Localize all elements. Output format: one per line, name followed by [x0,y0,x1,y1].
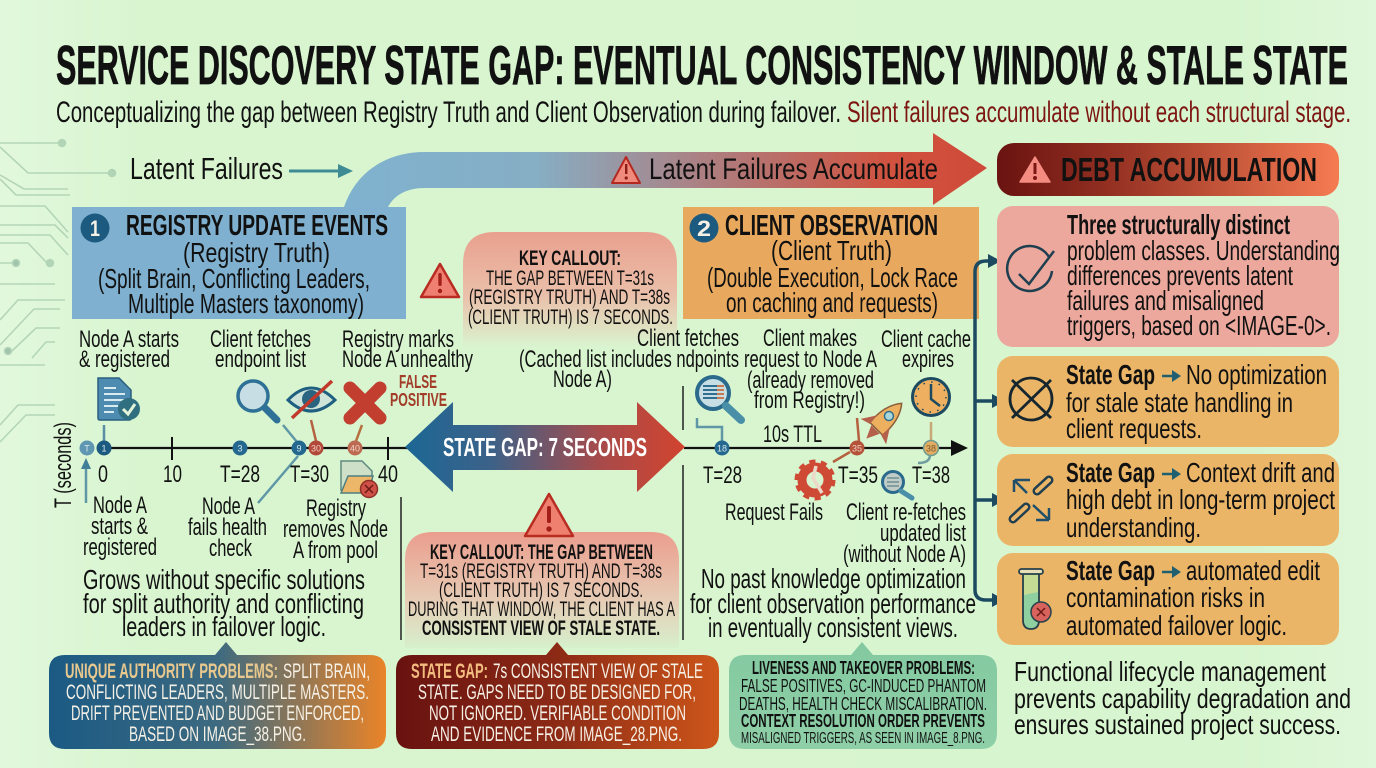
labels below registry timeline: registered [83,534,157,561]
axis markers: 40 [350,444,360,454]
arrow glyph [1162,468,1181,480]
client cache expires label [881,326,971,373]
client makes request label: from Registry!) [754,387,865,414]
card: automated edit contamination: State Gap [1066,555,1155,586]
callout: key callout top: KEY CALLOUT: [519,247,621,270]
panel: unique authority problems: BASED ON IMAGE_38.PNG. [129,723,306,746]
client timeline tick labels [703,462,950,489]
text: no past knowledge optimization: in eventually consistent views. [708,612,958,643]
number badge 1 [80,214,110,242]
client makes request label [744,325,877,414]
text: grows without specific solutions [83,564,365,642]
registry timeline tick labels [98,461,398,488]
number badge 2 [690,214,718,242]
registry timeline tick labels: T=28 [220,461,260,488]
card: automated edit contamination [997,553,1339,645]
card: context drift: State Gap [1066,457,1155,488]
panel: unique authority problems: SPLIT BRAIN, [283,660,370,683]
card: three structurally distinct [997,206,1340,347]
false positive label: FALSE [399,372,437,392]
axis markers: 30 [311,444,321,454]
icon: failed gear [797,462,833,498]
client makes request label: Client makes [763,325,857,352]
arrow: state gap 7 seconds: STATE GAP: 7 SECONDS [443,432,647,462]
icon: crossed circle [1010,378,1052,420]
labels above registry timeline: Node A unhealthy [342,346,474,373]
card: no optimization [997,356,1339,447]
labels below registry timeline: Registry [306,495,366,522]
callout: key callout lower [405,532,679,648]
panel: registry update events: Multiple Masters taxonomy) [128,288,364,319]
icon: clock [912,378,950,416]
axis markers: T [84,444,90,454]
axis markers: 1 [101,444,107,454]
arrow: state gap 7 seconds [405,402,685,492]
panel: liveness and takeover problems: MISALIGNED TRIGGERS, AS SEEN IN IMAGE_8.PNG. [741,730,985,747]
text: grows without specific solutions: Grows without specific solutions [83,564,365,595]
card: no optimization: client requests. [1066,413,1202,444]
panel: liveness and takeover problems: DEATHS, HEALTH CHECK MISCALIBRATION. [739,694,987,714]
labels below registry timeline: A from pool [293,537,378,564]
false positive label: POSITIVE [390,390,447,410]
panel: client observation [683,207,979,319]
client re-fetches label [843,499,966,568]
callout: key callout lower: DURING THAT WINDOW, THE CLIENT HAS A [408,598,675,621]
panel: registry update events: (Registry Truth) [183,237,330,268]
icon: rocket [854,391,914,451]
text: grows without specific solutions: for split authority and conflicting [83,588,364,619]
callout: key callout top: THE GAP BETWEEN T=31s [486,267,654,290]
subtitle: Conceptualizing the gap between Registry Truth and Client Observation during failover. [56,96,841,129]
client re-fetches label: Client re-fetches [846,499,966,526]
labels below registry timeline: starts & [91,513,148,540]
panel: liveness and takeover problems: FALSE POSITIVES, GC-INDUCED PHANTOM [741,676,986,696]
axis markers: 35 [852,444,862,454]
text: grows without specific solutions: leaders in failover logic. [122,611,326,642]
number badge 1: 1 [90,216,100,241]
axis markers [714,440,938,456]
text: functional lifecycle management [1014,656,1351,740]
text: no past knowledge optimization: for client observation performance [690,588,976,619]
registry timeline axis [80,420,408,503]
client timeline tick labels: T=28 [703,462,742,489]
panel: unique authority problems: UNIQUE AUTHORITY PROBLEMS: [65,660,278,683]
client fetches label [519,325,739,393]
icon: magnifier with list [697,377,741,420]
latent failures label with arrow: Latent Failures [130,151,283,186]
client timeline tick labels: T=35 [838,462,878,489]
arrow: latent failures accumulate: Latent Failures Accumulate [649,153,938,186]
callout: key callout top: (REGISTRY TRUTH) AND T=38s [469,286,670,309]
arrow glyph [1162,566,1181,578]
header: debt accumulation [997,143,1339,196]
false positive label [390,372,447,410]
axis markers: 3 [237,444,243,454]
panel: client observation: on caching and requests) [726,287,938,318]
card: three structurally distinct: failures and misaligned [1067,285,1264,316]
icon: warning above lower callout [525,494,573,536]
registry timeline tick labels: 40 [378,461,398,488]
text: no past knowledge optimization [690,563,976,643]
labels above registry timeline: Node A starts [79,326,179,353]
panel: state gap summary: 7s CONSISTENT VIEW OF STALE [493,660,703,683]
panel: liveness and takeover problems [729,642,997,749]
callout: key callout top [463,232,677,348]
arrow: latent failures accumulate [344,133,987,207]
labels below registry timeline: fails health [188,514,267,541]
card: context drift [997,454,1339,546]
panel: liveness and takeover problems: CONTEXT RESOLUTION ORDER PREVENTS [741,711,985,731]
panel: client observation: (Client Truth) [771,235,892,266]
panel: liveness and takeover problems: LIVENESS AND TAKEOVER PROBLEMS: [752,658,975,678]
icon: warning beside key callout [421,264,459,297]
panel: registry update events [72,207,406,319]
client cache expires label: expires [902,346,954,373]
T seconds axis label: T (seconds) [50,422,77,508]
card: automated edit contamination: automated edit [1186,555,1320,586]
labels below registry timeline: check [209,535,252,562]
connector arrows to debt cards [975,254,1005,607]
icon: check circle [1007,246,1054,291]
arrow glyph [1162,370,1181,382]
client fetches label: Client fetches [637,325,739,352]
axis markers: 18 [717,444,727,454]
client makes request label: request to Node A [744,346,877,373]
panel: state gap summary: AND EVIDENCE FROM IMAGE_28.PNG. [431,723,682,746]
axis markers: 9 [296,444,302,454]
icon: document with check [98,378,140,420]
labels below registry timeline: Node A [93,492,147,519]
icon: test tube [1019,569,1051,629]
icon: small magnifier [882,472,912,498]
card: automated edit contamination: contamination risks in [1066,582,1265,613]
client timeline axis [684,418,968,463]
card: no optimization: for stale state handling in [1066,387,1293,418]
icon: crossed eye [288,381,335,418]
labels above registry timeline [79,326,474,373]
panel: client observation: (Double Execution, Lock Race [707,262,958,293]
registry timeline tick labels: 10 [163,461,182,488]
panel: client observation: CLIENT OBSERVATION [725,210,938,242]
panel: state gap summary [396,642,719,749]
labels above registry timeline: endpoint list [215,346,306,373]
request fails label: Request Fails [725,499,823,526]
card: context drift: understanding. [1066,512,1201,543]
client re-fetches label: updated list [880,520,966,547]
card: no optimization: No optimization [1186,359,1327,390]
callout: key callout lower: KEY CALLOUT: THE GAP BETWEEN [430,541,653,564]
icon: red x [350,388,380,418]
panel: unique authority problems [49,642,386,749]
panel: state gap summary: NOT IGNORED. VERIFIABLE CONDITION [429,702,686,725]
client cache expires label: Client cache [881,326,971,353]
panel: state gap summary: STATE. GAPS NEED TO BE DESIGNED FOR, [418,681,696,704]
labels below registry timeline: Node A [202,493,255,520]
panel: unique authority problems: CONFLICTING LEADERS, MULTIPLE MASTERS. [66,681,369,704]
icon: broken link [1013,480,1049,520]
callout: key callout top: (CLIENT TRUTH) IS 7 SECONDS. [468,306,673,329]
panel: registry update events: REGISTRY UPDATE EVENTS [126,210,388,242]
client re-fetches label: (without Node A) [843,541,966,568]
client fetches label: (Cached list includes ndpoints [519,346,739,373]
labels above registry timeline: & registered [79,346,170,373]
panel: state gap summary: STATE GAP: [411,660,488,683]
registry timeline tick labels: T=30 [290,461,329,488]
labels below registry timeline [83,492,388,564]
card: no optimization: State Gap [1066,359,1155,390]
text: no past knowledge optimization: No past knowledge optimization [701,563,966,594]
client makes request label: (already removed [747,367,874,394]
axis markers: 38 [926,444,936,454]
callout: key callout lower: T=31s (REGISTRY TRUTH) AND T=38s [420,560,662,583]
icon: warning triangle [612,157,640,183]
labels below registry timeline: removes Node [283,516,388,543]
registry timeline tick labels: 0 [98,461,108,488]
client fetches label: Node A) [553,366,612,393]
labels above registry timeline: Registry marks [342,326,454,353]
panel: registry update events: (Split Brain, Conflicting Leaders, [98,263,370,294]
10s ttl label: 10s TTL [763,421,822,448]
callout: key callout lower: (CLIENT TRUTH) IS 7 SECONDS. [439,579,643,602]
callout: key callout lower: CONSISTENT VIEW OF STALE STATE. [422,617,660,640]
up arrow to T [81,458,91,503]
icon: warning triangle [1020,157,1050,182]
number badge 2: 2 [697,216,711,241]
panel: unique authority problems: DRIFT PREVENTED AND BUDGET ENFORCED, [71,702,364,725]
labels above registry timeline: Client fetches [210,326,311,353]
axis markers [80,440,362,456]
client timeline tick labels: T=38 [912,462,950,489]
card: automated edit contamination: automated failover logic. [1066,610,1287,641]
icon: magnifier [238,381,277,420]
icon: folder removed [341,461,378,498]
